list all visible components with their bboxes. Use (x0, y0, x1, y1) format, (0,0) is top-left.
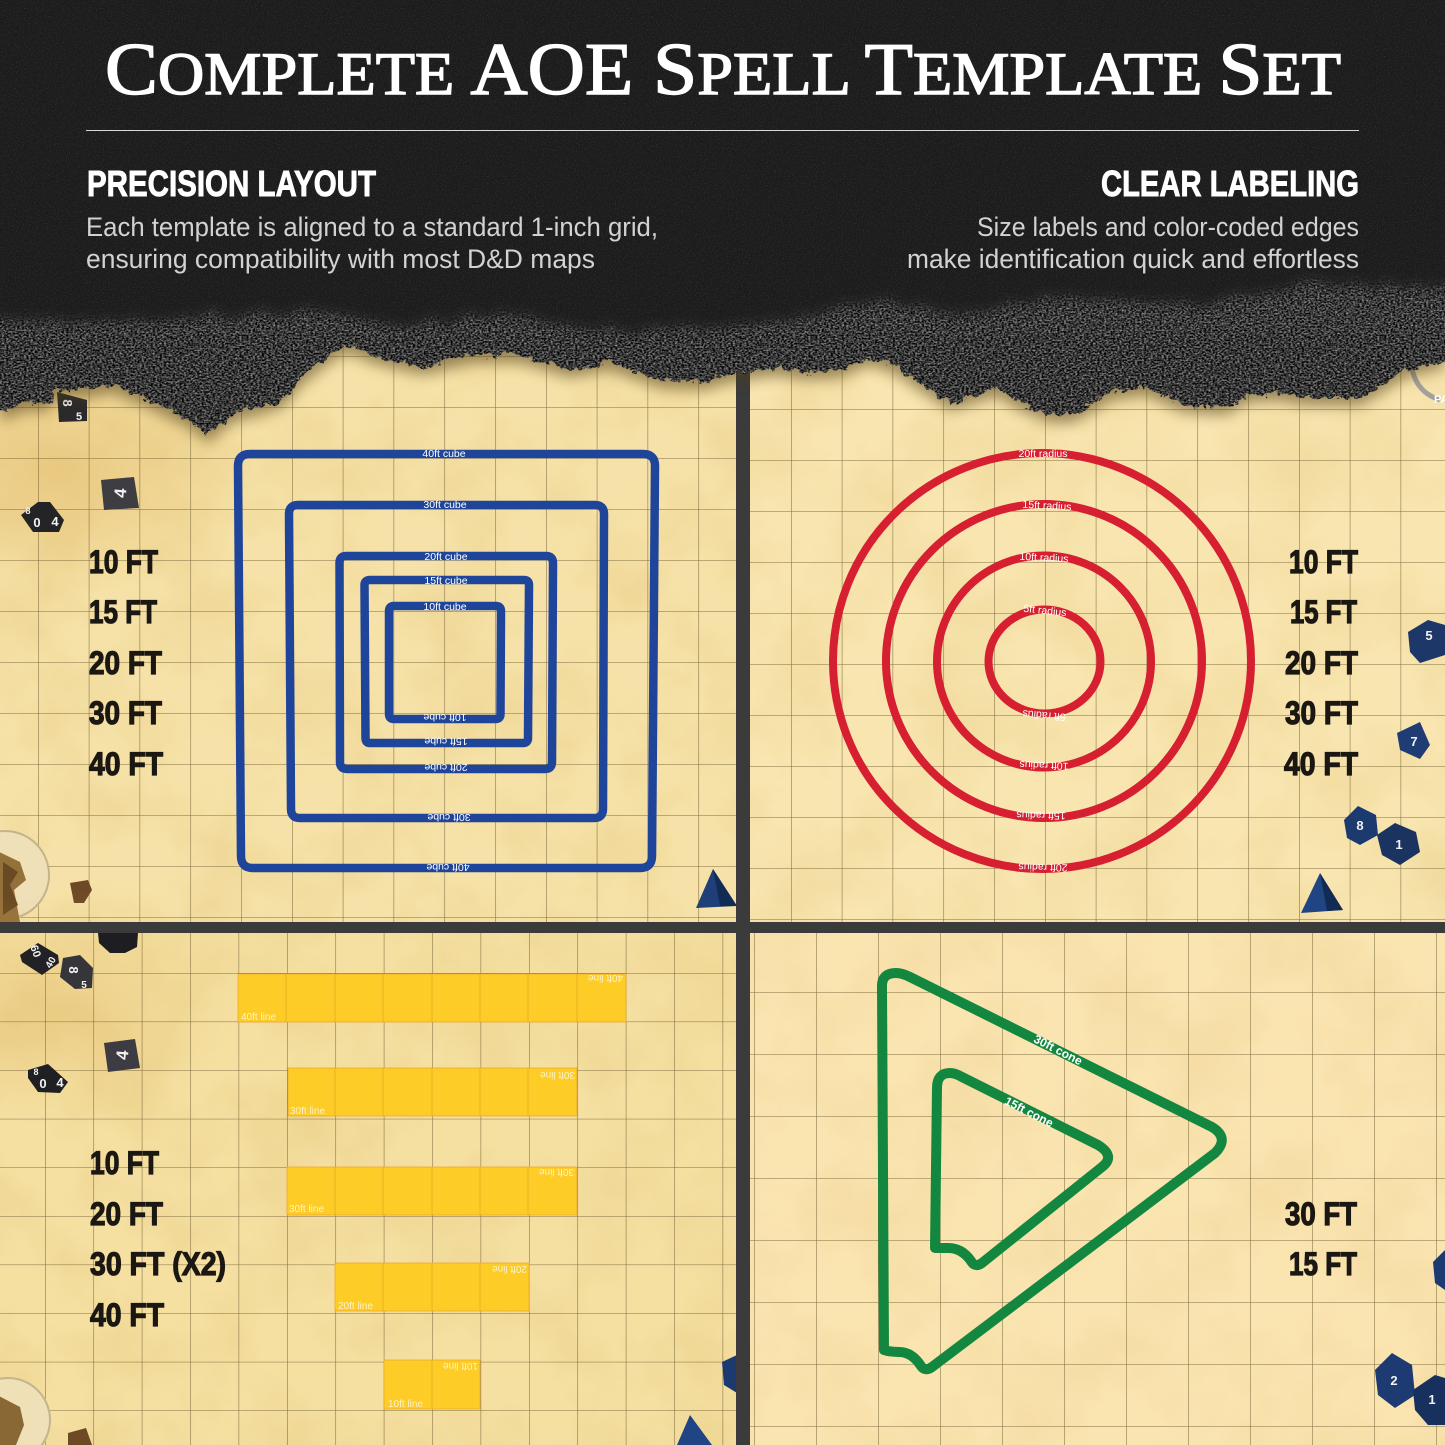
cube sizes list: 30 FT (89, 695, 162, 731)
blue dice bottom-right of panel (677, 1355, 737, 1445)
radius sizes list: 40 FT (1284, 746, 1358, 782)
cube labels: 20ft cube (424, 551, 468, 563)
black dice top-left (21, 392, 139, 532)
line labels: 30ft line (540, 1069, 575, 1080)
panel: cones on grid map (750, 933, 1445, 1445)
blue dice bottom right: 1 (1428, 1392, 1436, 1407)
radius sizes list: 15 FT (1290, 594, 1357, 630)
cube labels: 30ft cube (423, 499, 467, 511)
line labels: 40ft line (588, 972, 623, 983)
blue dice right: 5 (1425, 628, 1433, 643)
cone labels (1002, 1032, 1085, 1130)
black dice top-left: 4 (111, 487, 130, 499)
black dice bottom-left: 0 (39, 1076, 47, 1091)
cube templates (238, 454, 655, 868)
line sizes list: 40 FT (90, 1297, 164, 1333)
black dice bottom-left: 40 (44, 955, 59, 970)
cube labels: 15ft cube (424, 575, 468, 587)
black dice bottom-left: 5 (81, 980, 87, 991)
radius labels: 15ft radius (1022, 499, 1072, 513)
cube labels: 40ft cube (426, 861, 470, 873)
line labels: 10ft line (388, 1399, 423, 1410)
cone sizes list (1285, 1196, 1357, 1282)
radius sizes list: 10 FT (1289, 544, 1358, 580)
speckled paper grain (0, 0, 1445, 335)
cube labels: 10ft cube (423, 601, 467, 613)
radius labels: 20ft radius (1018, 861, 1068, 873)
text block: clear labeling: make identification quick and effortless (907, 244, 1359, 274)
black dice bottom-left: 8 (33, 1067, 39, 1077)
radius labels: 20ft radius (1018, 448, 1068, 460)
cone labels: 15ft cone (1002, 1094, 1056, 1130)
radius labels: 5ft radius (1023, 603, 1067, 619)
text block: clear labeling: Size labels and color-coded edges (977, 212, 1359, 242)
line sizes list (90, 1145, 226, 1333)
line sizes list: 30 FT (X2) (90, 1246, 226, 1282)
line labels: 30ft line (289, 1204, 324, 1215)
torn edge shadow (0, 300, 1445, 443)
black dice bottom-left: 4 (56, 1075, 64, 1090)
blue dice right (1301, 620, 1445, 913)
cube labels: 30ft cube (427, 811, 471, 823)
cone sizes list: 15 FT (1289, 1246, 1357, 1282)
text block: precision layout: PRECISION LAYOUT (87, 163, 376, 204)
blue tetrahedron die (696, 869, 737, 908)
radius labels: 10ft radius (1019, 758, 1069, 772)
black dice top-left: 0 (33, 515, 41, 530)
cube sizes list: 20 FT (89, 645, 162, 681)
line labels: 10ft line (443, 1360, 478, 1371)
black header band (0, 0, 1445, 335)
black dice top-left: 5 (76, 411, 82, 423)
cube sizes list: 40 FT (89, 746, 163, 782)
line labels: 30ft line (539, 1166, 574, 1177)
text block: clear labeling (907, 163, 1359, 274)
line labels: 20ft line (492, 1263, 527, 1274)
black dice top-left: 8 (25, 506, 31, 516)
miniatures in dish lower (0, 1378, 92, 1445)
line labels: 20ft line (338, 1301, 373, 1312)
title: COMPLETE AOE S PELL TEMPLATE SET (105, 29, 1341, 111)
torn black paper edge (0, 250, 1445, 435)
black dice bottom-left: 8 (66, 966, 81, 974)
cube sizes list: 15 FT (89, 594, 157, 630)
radius labels: 10ft radius (1019, 551, 1069, 565)
blue dice bottom right: 2 (1390, 1373, 1398, 1388)
blue dice right: 1 (1395, 837, 1403, 852)
black dice bottom-left: 4 (113, 1049, 132, 1061)
blue dice right: 8 (1356, 818, 1364, 833)
cube sizes list (89, 544, 163, 782)
line labels (241, 972, 623, 1410)
divider under title (86, 130, 1359, 131)
cube labels: 20ft cube (424, 761, 468, 773)
cube labels: 40ft cube (422, 448, 466, 460)
line sizes list: 10 FT (90, 1145, 159, 1181)
radius labels: 5ft radius (1022, 707, 1066, 723)
radius labels: 15ft radius (1016, 809, 1066, 821)
line templates (238, 974, 626, 1409)
cube sizes list: 10 FT (89, 544, 158, 580)
cube labels (422, 448, 471, 873)
blue dice right: 7 (1410, 734, 1418, 749)
line labels: 30ft line (290, 1106, 325, 1117)
radius rings (833, 453, 1251, 869)
text block: precision layout: ensuring compatibility with most D&D maps (86, 244, 595, 274)
cone sizes list: 30 FT (1285, 1196, 1357, 1232)
black dice top-left: 8 (60, 399, 75, 407)
miniatures in dish (0, 831, 92, 922)
cube labels: 15ft cube (424, 735, 468, 747)
cone templates (882, 973, 1222, 1369)
text block: clear labeling: CLEAR LABELING (1101, 163, 1359, 204)
black dice bottom-left: 60 (27, 944, 43, 959)
panel: cubes on grid map (0, 300, 737, 922)
text block: precision layout: Each template is aligned to a standard 1-inch grid, (86, 212, 658, 242)
radius sizes list (1284, 544, 1358, 782)
radius sizes list: 30 FT (1285, 695, 1358, 731)
grey ring template corner (1412, 368, 1445, 406)
panel: lines on grid map (0, 890, 737, 1445)
panel: radius circles on grid map (750, 300, 1445, 922)
text block: precision layout (86, 163, 658, 274)
black dice bottom-left (20, 933, 140, 1093)
radius sizes list: 20 FT (1285, 645, 1358, 681)
cube labels: 10ft cube (423, 711, 467, 723)
cone labels: 30ft cone (1031, 1032, 1085, 1068)
line sizes list: 20 FT (90, 1196, 163, 1232)
blue dice bottom right (1375, 1250, 1445, 1425)
centre dividers (0, 340, 1445, 1445)
template grid overlay (286, 974, 577, 1409)
radius labels (1016, 448, 1072, 873)
line labels: 40ft line (241, 1012, 276, 1023)
black dice top-left: 4 (51, 514, 59, 529)
